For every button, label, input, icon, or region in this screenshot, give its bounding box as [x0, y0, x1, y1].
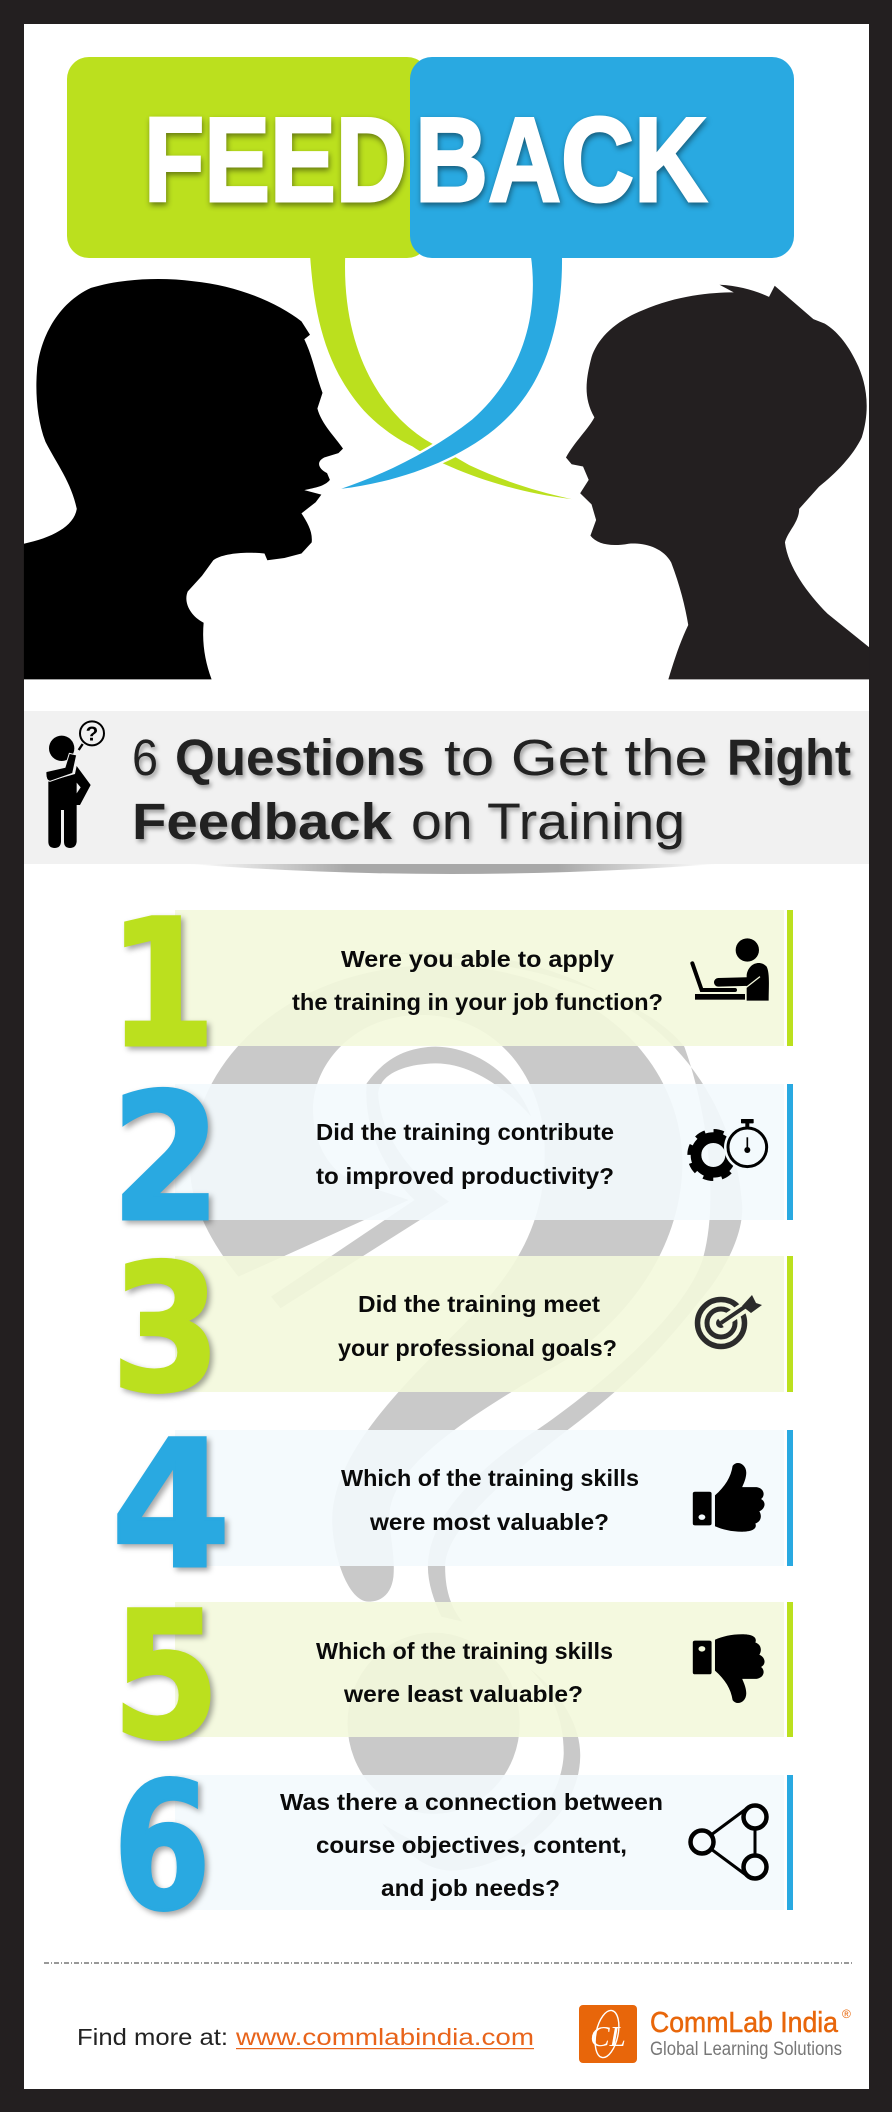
- title text: to Get the: [444, 729, 708, 786]
- icon: thumbs down: [693, 1634, 765, 1703]
- footer: find more link: Find more at:: [77, 2024, 228, 2050]
- title text: Questions: [175, 729, 425, 786]
- question text 6: and job needs?: [381, 1875, 560, 1901]
- number 5: 5: [112, 1574, 220, 1779]
- green speech bubble: [67, 57, 429, 258]
- FEEDBACK wordmark: [144, 93, 707, 227]
- title text: 6: [132, 729, 158, 786]
- question text 3: [338, 1291, 617, 1361]
- question text 1: the training in your job function?: [292, 989, 663, 1015]
- question text 6: Was there a connection between: [280, 1789, 663, 1815]
- left silhouette: [24, 279, 343, 679]
- CommLab India logo: ®: [842, 2007, 851, 2021]
- icon: gear and stopwatch: [690, 1119, 771, 1178]
- question text 2: [316, 1119, 614, 1189]
- question text 5: were least valuable?: [343, 1681, 583, 1707]
- CommLab India logo: Global Learning Solutions: [650, 2039, 842, 2060]
- footer: find more link: [77, 2024, 534, 2050]
- question 1: [108, 882, 793, 1087]
- question 3: [111, 1227, 793, 1432]
- question 4: [111, 1403, 793, 1608]
- question text 4: were most valuable?: [369, 1509, 609, 1535]
- icon: share nodes: [690, 1806, 766, 1878]
- icon: thumbs up: [693, 1463, 765, 1532]
- question text 5: Which of the training skills: [316, 1638, 613, 1664]
- green speech tail: [310, 254, 572, 499]
- FEEDBACK wordmark: BACK: [415, 93, 707, 227]
- icon: thinking person: ?: [86, 723, 98, 746]
- question text 2: to improved productivity?: [316, 1163, 614, 1189]
- hero: feedback speech bubbles and silhouettes: [24, 57, 869, 679]
- title text: [132, 729, 851, 850]
- question 2: [111, 1056, 793, 1261]
- icon: person at laptop: [692, 938, 769, 1001]
- number 3: 3: [111, 1227, 221, 1432]
- right silhouette: [566, 285, 869, 679]
- CommLab India logo: [579, 2005, 851, 2063]
- FEEDBACK wordmark: FEED: [144, 93, 407, 227]
- blue speech tail: [341, 254, 562, 489]
- question 5: [112, 1574, 793, 1779]
- blue speech bubble: [410, 57, 794, 258]
- background question mark: [190, 952, 742, 1871]
- question text 3: Did the training meet: [358, 1291, 600, 1317]
- question text 4: Which of the training skills: [341, 1465, 639, 1491]
- question text 6: course objectives, content,: [316, 1832, 627, 1858]
- question text 6: [280, 1789, 663, 1901]
- question 6: [113, 1745, 793, 1950]
- question text 2: Did the training contribute: [316, 1119, 614, 1145]
- question text 1: [292, 946, 663, 1015]
- question text 1: Were you able to apply: [341, 946, 614, 972]
- number 6: 6: [113, 1745, 211, 1950]
- CommLab India logo: CommLab India: [650, 2007, 839, 2039]
- CommLab India logo: CL: [590, 2021, 626, 2053]
- question text 4: [341, 1465, 639, 1535]
- question text 3: your professional goals?: [338, 1335, 617, 1361]
- icon: target with arrow: [698, 1295, 762, 1346]
- footer: find more link: www.commlabindia.com: [235, 2024, 534, 2050]
- icon: thinking person: [46, 721, 104, 848]
- title text: Feedback: [132, 793, 393, 850]
- number 2: 2: [111, 1056, 221, 1261]
- number 4: 4: [111, 1403, 231, 1608]
- title text: Right: [727, 729, 851, 786]
- question text 5: [316, 1638, 613, 1707]
- title band: [24, 711, 869, 874]
- title text: on Training: [411, 793, 685, 850]
- number 1: 1: [108, 882, 216, 1087]
